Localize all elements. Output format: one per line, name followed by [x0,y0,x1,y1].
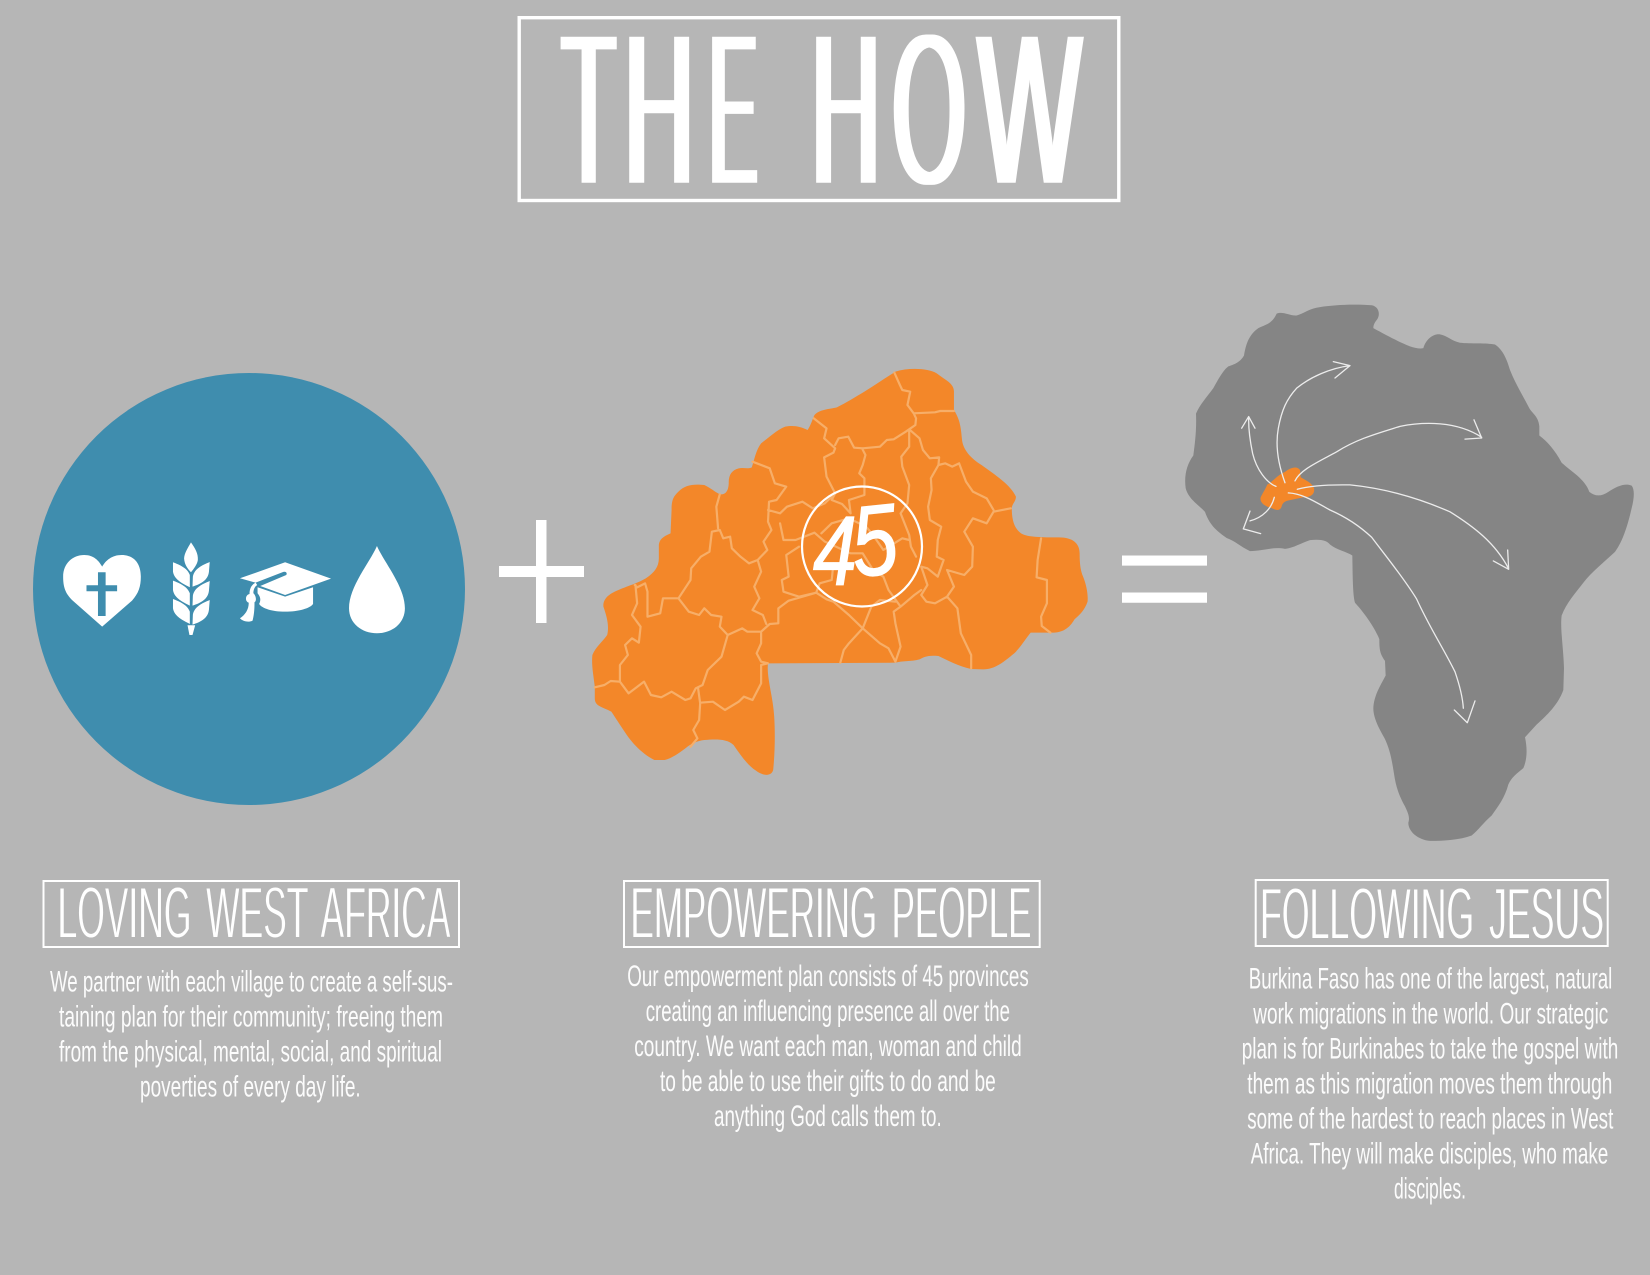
text block: loving west africa: taining plan for their community; freeing them [59,1001,443,1034]
text block: loving west africa [50,966,453,1104]
icons: heart, wheat, cap, water drop [63,542,405,635]
icon: graduation cap [240,562,331,622]
heading: LOVING WEST AFRICA [44,873,459,954]
heading: EMPOWERING PEOPLE [624,873,1040,954]
text block: empowering people: Our empowerment plan consists of 45 provinces [627,960,1029,993]
text block: loving west africa: from the physical, mental, social, and spiritual [59,1036,442,1069]
callout: 45 provinces circle: 4 [813,496,857,606]
text: EMPOWERING PEOPLE [630,873,1032,954]
panel: Africa migration map [1185,305,1634,841]
callout: 45 provinces circle [802,483,922,606]
text block: loving west africa: We partner with each village to create a self-sus- [50,966,453,999]
panel: Burkina Faso province map [592,369,1088,775]
text block: empowering people: country. We want each man, woman and child [634,1030,1022,1063]
text block: following jesus: disciples. [1394,1172,1466,1205]
text block: following jesus [1242,962,1618,1205]
title: THE HOW [519,0,1119,232]
text block: empowering people: to be able to use their gifts to do and be [660,1065,996,1098]
plus sign [499,520,584,623]
text block: empowering people: creating an influencing presence all over the [646,995,1010,1028]
text block: empowering people [627,960,1029,1133]
panel: loving west africa circle [33,373,465,805]
icon: wheat [173,542,210,635]
icon: heart with cross [63,555,141,627]
text: LOVING WEST AFRICA [58,873,451,954]
icon: water drop [349,546,405,633]
text block: empowering people: anything God calls them to. [714,1100,942,1133]
equals sign [1122,556,1207,603]
callout: 45 provinces circle: 5 [846,483,903,599]
Africa silhouette [1185,305,1634,841]
arrows: migration routes [1242,362,1509,723]
Burkina Faso highlight [1260,468,1314,510]
text block: loving west africa: poverties of every day life. [140,1071,361,1104]
